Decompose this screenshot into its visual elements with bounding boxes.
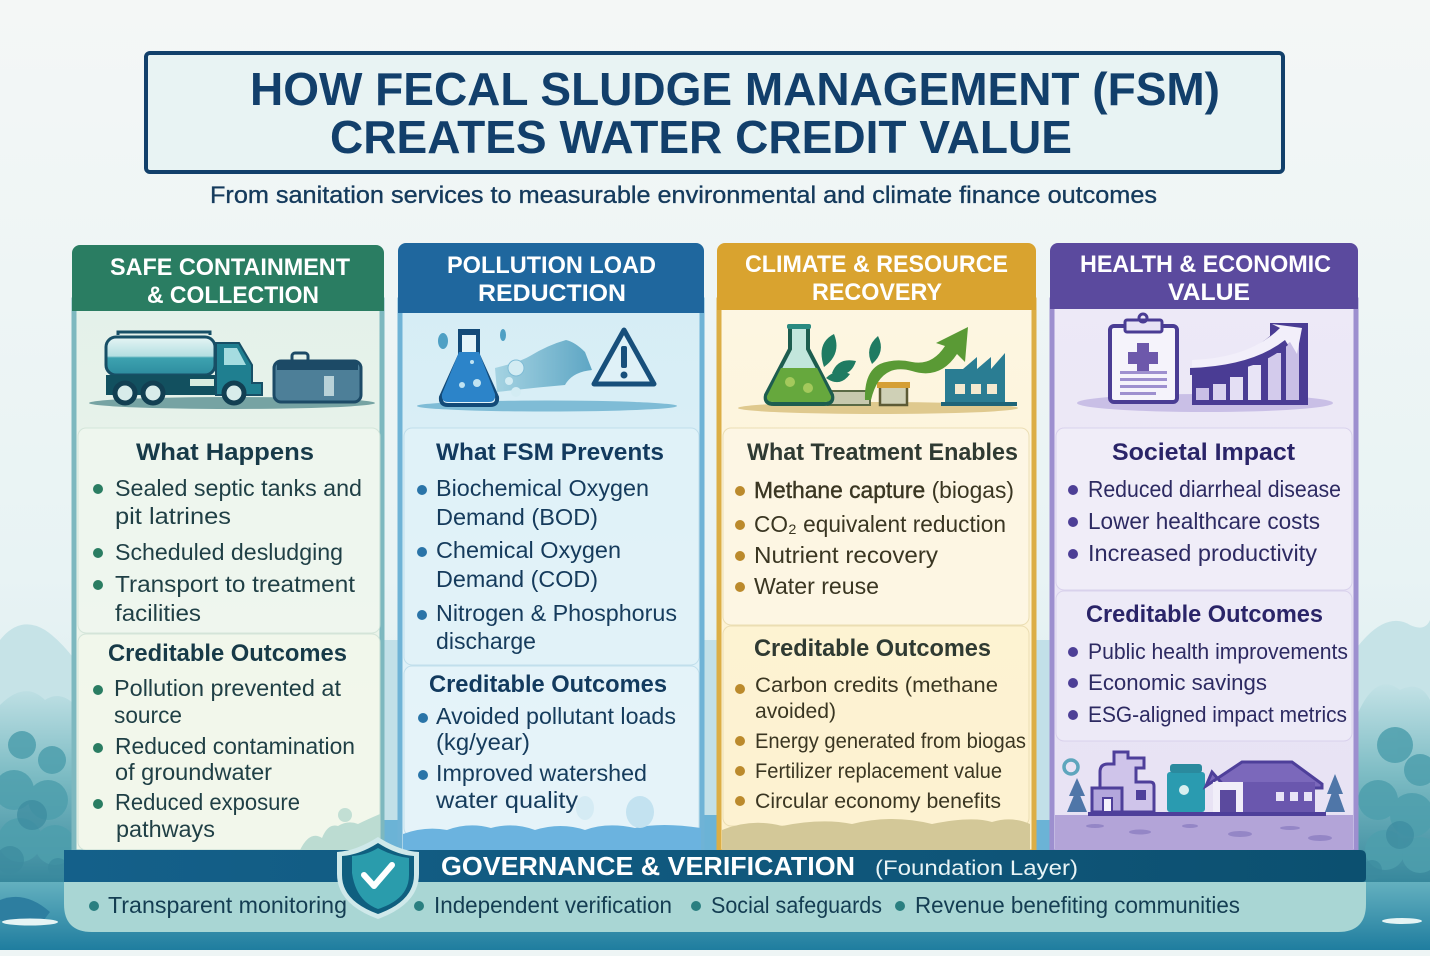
- creditable outcomes list: Pollution prevented at: [114, 675, 342, 701]
- creditable outcomes list: Economic savings: [1088, 670, 1267, 695]
- creditable outcomes list: Public health improvements: [1088, 639, 1348, 664]
- creditable outcomes list: Circular economy benefits: [755, 790, 1001, 813]
- panel heading: [745, 251, 1008, 306]
- creditable outcomes list: Carbon credits (methane: [755, 674, 998, 697]
- panel: health and economic value: [1050, 243, 1358, 852]
- bullet list: pit latrines: [115, 503, 231, 529]
- title: CREATES WATER CREDIT VALUE: [330, 111, 1072, 163]
- bullet list: Increased productivity: [1088, 540, 1317, 566]
- creditable outcomes list: avoided): [755, 700, 836, 723]
- foundation bullet list: Independent verification: [434, 892, 672, 918]
- icon: flask, plant, arrow and factory: [738, 324, 1018, 414]
- creditable outcomes list: pathways: [116, 816, 215, 842]
- card: what fsm prevents: [403, 428, 701, 852]
- title box: [146, 53, 1283, 172]
- card: what treatment enables: Creditable Outcomes: [754, 635, 991, 662]
- bullet list: Nitrogen & Phosphorus: [436, 600, 677, 626]
- bullet list: [735, 477, 1014, 599]
- panel: pollution load reduction: [398, 243, 704, 852]
- panel heading: POLLUTION LOAD: [447, 252, 656, 279]
- card: societal impact: Creditable Outcomes: [1086, 601, 1323, 628]
- card: what happens: What Happens: [136, 439, 314, 466]
- creditable outcomes list: Energy generated from biogas: [755, 730, 1026, 753]
- panel heading: CLIMATE & RESOURCE: [745, 251, 1008, 278]
- creditable outcomes list: [735, 674, 1026, 813]
- icon: shield with check: [337, 837, 419, 919]
- bullet list: Water reuse: [754, 573, 879, 599]
- bullet list: CO₂ equivalent reduction: [754, 511, 1006, 537]
- bullet list: Lower healthcare costs: [1088, 508, 1320, 534]
- bullet list: Nutrient recovery: [754, 542, 939, 568]
- bullet list: discharge: [436, 628, 536, 654]
- icon: tanker truck and septic tank: [89, 332, 375, 409]
- panel heading: SAFE CONTAINMENT: [110, 254, 350, 281]
- bullet list: Sealed septic tanks and: [115, 475, 362, 501]
- foundation layer: governance and verification: [64, 837, 1366, 932]
- card: what treatment enables: [722, 428, 1030, 850]
- bullet list: Demand (COD): [436, 566, 598, 592]
- creditable outcomes list: ESG-aligned impact metrics: [1088, 702, 1347, 727]
- bullet list: Biochemical Oxygen: [436, 475, 649, 501]
- bullet list: facilities: [115, 600, 201, 626]
- panel heading: HEALTH & ECONOMIC: [1080, 251, 1331, 278]
- foundation bullet list: Social safeguards: [711, 892, 882, 918]
- creditable outcomes list: of groundwater: [115, 759, 272, 785]
- subtitle: From sanitation services to measurable environmental and climate finance outcomes: [210, 182, 1157, 209]
- bullet list: [417, 475, 677, 654]
- icon: clipboard and rising chart: [1077, 314, 1333, 412]
- bullet list: Scheduled desludging: [115, 539, 343, 565]
- creditable outcomes list: (kg/year): [436, 729, 530, 755]
- creditable outcomes list: [93, 675, 355, 842]
- creditable outcomes list: source: [114, 702, 182, 728]
- creditable outcomes list: Fertilizer replacement value: [755, 760, 1002, 783]
- bullet list: [1068, 476, 1341, 566]
- title: HOW FECAL SLUDGE MANAGEMENT (FSM): [250, 63, 1220, 115]
- panel: climate and resource recovery: [717, 243, 1036, 852]
- panel heading: [1080, 251, 1331, 306]
- creditable outcomes list: Avoided pollutant loads: [436, 703, 676, 729]
- card: what fsm prevents: Creditable Outcomes: [429, 671, 667, 698]
- sub-label: (Foundation Layer): [875, 857, 1078, 880]
- creditable outcomes list: Improved watershed: [436, 760, 647, 786]
- foundation bullet list: [89, 892, 1240, 918]
- creditable outcomes list: water quality: [435, 787, 579, 813]
- card: societal impact: [1056, 428, 1352, 741]
- panel heading: RECOVERY: [812, 279, 942, 306]
- card: what treatment enables: What Treatment Enables: [747, 439, 1018, 466]
- creditable outcomes list: Reduced exposure: [115, 789, 300, 815]
- foundation bullet list: Transparent monitoring: [108, 892, 347, 918]
- icon: flask, discharge and warning: [417, 329, 677, 412]
- bullet list: Demand (BOD): [436, 504, 598, 530]
- foundation bullet list: Revenue benefiting communities: [915, 892, 1240, 918]
- bullet list: Methane capture (biogas): [754, 477, 1014, 503]
- card: what fsm prevents: What FSM Prevents: [436, 439, 664, 466]
- creditable outcomes list: Reduced contamination: [115, 733, 355, 759]
- creditable outcomes list: [418, 703, 676, 813]
- panel: safe containment and collection: [72, 245, 384, 852]
- card: what happens: [78, 428, 380, 850]
- illustration: community buildings: [1055, 752, 1353, 850]
- card: societal impact: Societal Impact: [1112, 439, 1295, 466]
- heading: GOVERNANCE & VERIFICATION: [441, 851, 855, 881]
- title: [250, 63, 1220, 163]
- panel heading: [447, 252, 656, 307]
- panel heading: VALUE: [1168, 279, 1250, 306]
- card: what happens: Creditable Outcomes: [108, 640, 347, 667]
- bullet list: [93, 475, 362, 626]
- bullet list: Transport to treatment: [115, 571, 356, 597]
- bullet list: Reduced diarrheal disease: [1088, 476, 1341, 502]
- creditable outcomes list: [1068, 639, 1348, 727]
- panel heading: REDUCTION: [478, 280, 626, 307]
- panel heading: [110, 254, 350, 309]
- panel heading: & COLLECTION: [147, 282, 319, 309]
- bullet list: Chemical Oxygen: [436, 537, 621, 563]
